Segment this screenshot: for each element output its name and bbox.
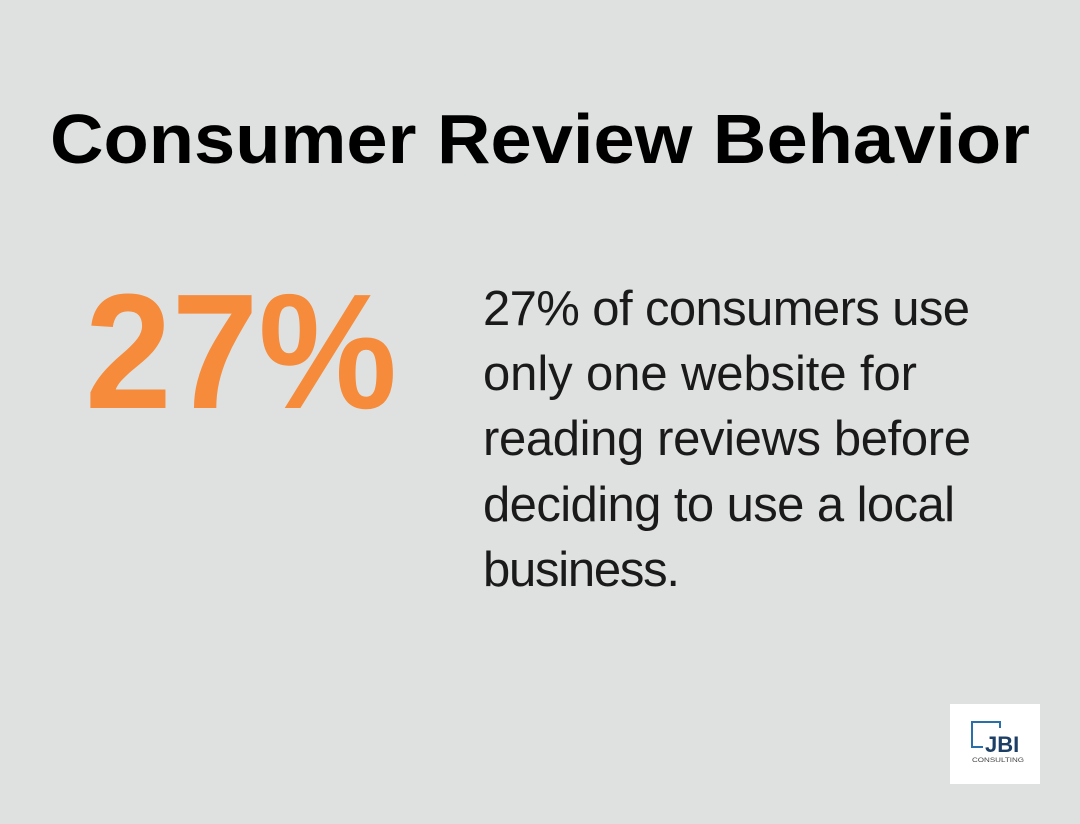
description text: reading reviews before <box>483 412 971 466</box>
big stat: 27%: 27% <box>85 260 397 443</box>
title: Consumer Review Behavior <box>50 100 1030 178</box>
logo: JBI Consulting: CONSULTING <box>972 757 1024 764</box>
description text <box>483 282 971 597</box>
description text: 27% of consumers use <box>483 282 970 336</box>
logo: JBI Consulting <box>950 704 1040 784</box>
logo: JBI Consulting: JBI <box>985 732 1019 757</box>
description text: deciding to use a local <box>483 478 955 532</box>
description text: only one website for <box>483 347 917 401</box>
description text: business. <box>483 543 680 597</box>
